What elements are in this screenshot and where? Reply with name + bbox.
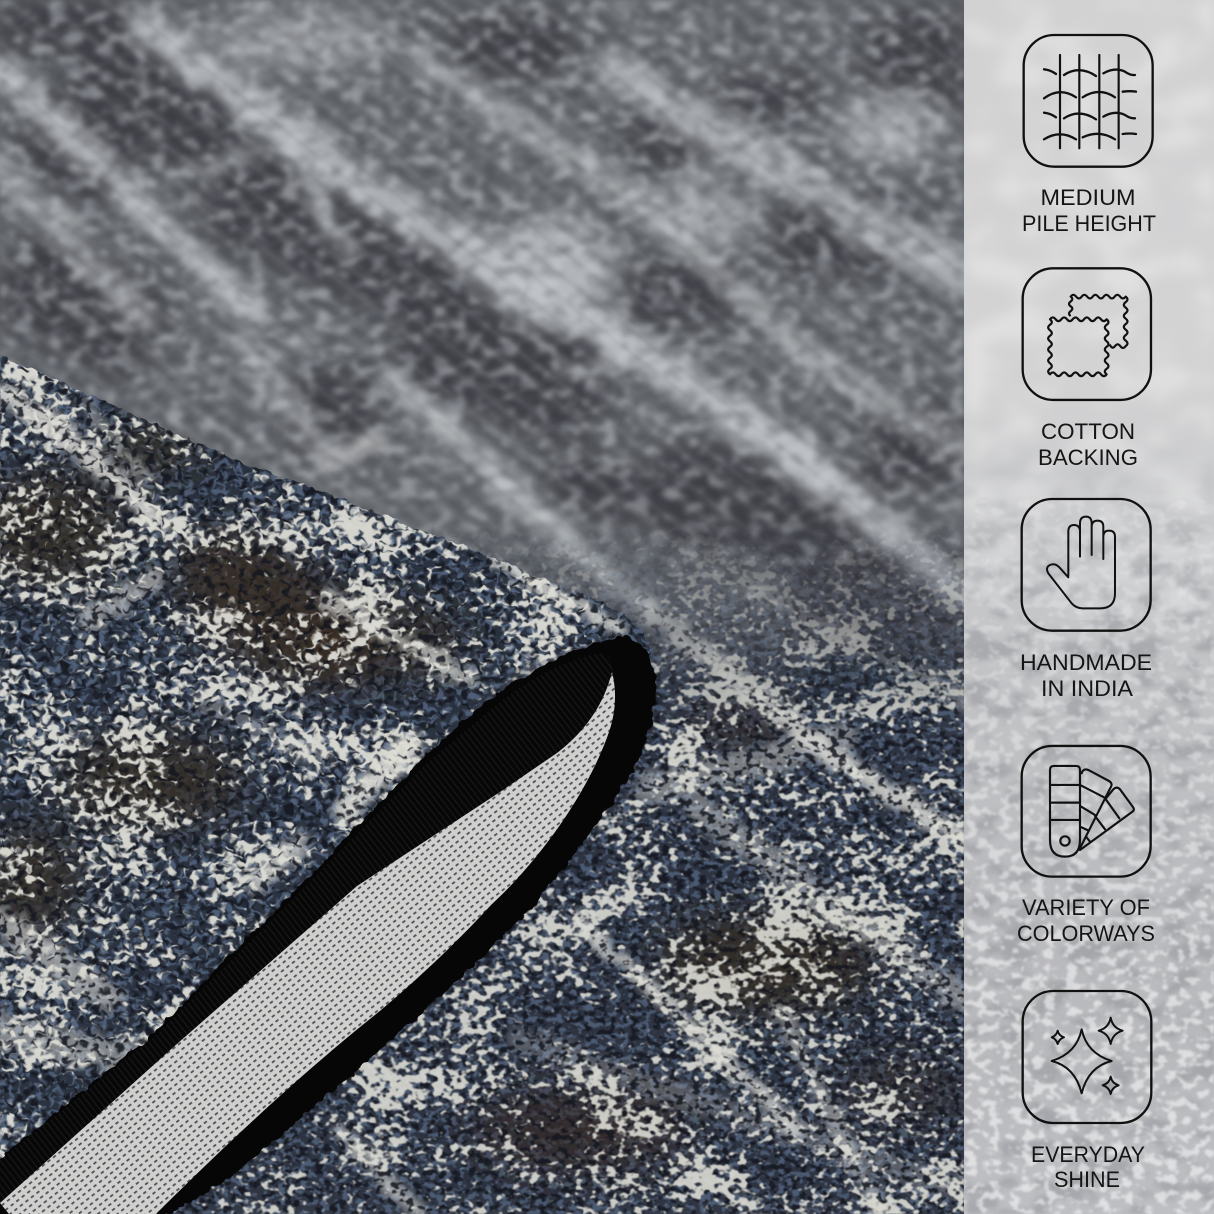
rug surface: sharp foreground pile (0, 480, 965, 1214)
rug surface: blurred plaid background (0, 0, 965, 1214)
label: variety of colorways: VARIETY OF (1022, 895, 1150, 920)
photo: rug close-up (0, 0, 965, 1214)
label: everyday shine: SHINE (1054, 1167, 1120, 1192)
icon: raised hand (1022, 499, 1151, 631)
feature: cotton backing (1023, 268, 1151, 470)
label: variety of colorways (1017, 895, 1155, 946)
label: cotton backing: COTTON (1041, 419, 1135, 444)
rug underside: cotton backing (0, 672, 615, 1214)
rug underside: shadowed ribbing (0, 654, 615, 1203)
black pile rim under the fold (0, 636, 656, 1214)
label: handmade in india: HANDMADE (1020, 650, 1152, 675)
feature: medium pile height (1022, 35, 1156, 236)
feature: everyday shine (1023, 991, 1151, 1192)
panel: feature sidebar (964, 0, 1214, 1214)
label: medium pile height: MEDIUM (1040, 185, 1136, 210)
label: variety of colorways: COLORWAYS (1017, 921, 1155, 946)
label: medium pile height: PILE HEIGHT (1022, 211, 1156, 236)
icon: fabric swatches (1023, 268, 1151, 400)
label: cotton backing (1038, 419, 1138, 470)
feature: handmade in india (1020, 499, 1152, 701)
label: handmade in india: IN INDIA (1041, 676, 1133, 701)
label: cotton backing: BACKING (1038, 445, 1138, 470)
label: handmade in india (1020, 650, 1152, 701)
label: everyday shine: EVERYDAY (1031, 1142, 1145, 1167)
label: everyday shine (1031, 1142, 1145, 1192)
icon: colour swatch fan (1022, 746, 1151, 877)
label: medium pile height (1022, 185, 1156, 236)
icon: woven pile grid (1024, 35, 1153, 167)
feature: variety of colorways (1017, 746, 1155, 946)
icon: sparkles (1023, 991, 1151, 1123)
rolled rug fold: pile face (0, 340, 670, 1170)
